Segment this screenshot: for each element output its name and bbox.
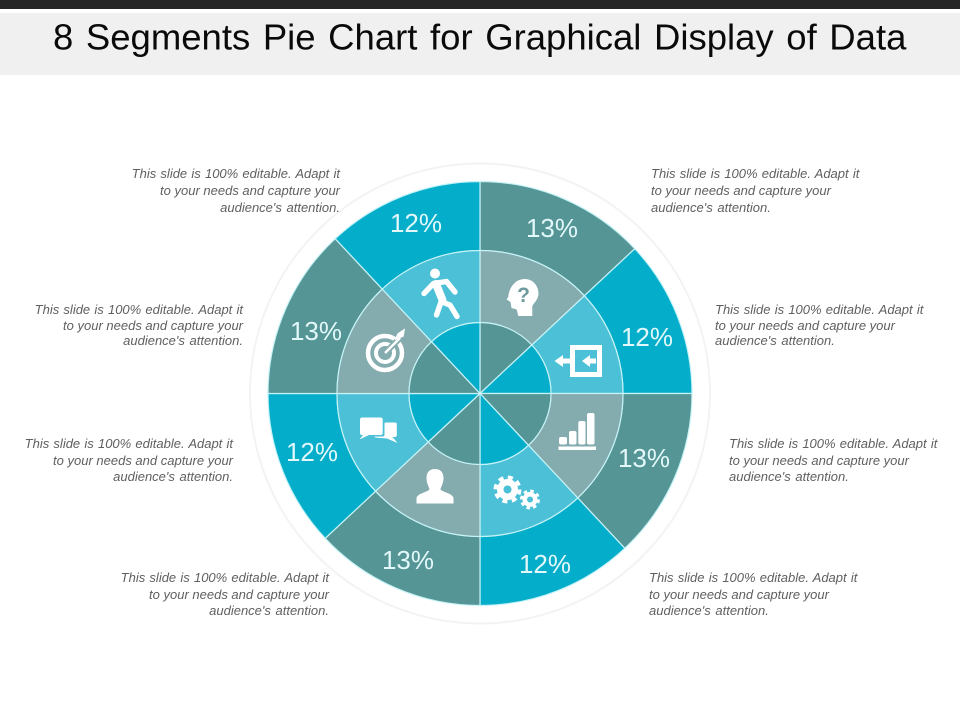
text block: right lower: to your needs and capture your (729, 453, 910, 468)
text block: bottom right: to your needs and capture your (649, 587, 830, 602)
percent label 13% left upper: 13% (290, 316, 342, 346)
outer faint ring (250, 164, 710, 624)
segment 1 (480, 182, 635, 394)
segment 7 (268, 239, 480, 394)
icon: speech bubbles (360, 418, 398, 443)
text block: bottom left: to your needs and capture your (149, 587, 330, 602)
icon: person bust (416, 469, 454, 504)
text block: left lower (25, 436, 234, 484)
text block: top right: to your needs and capture your (651, 183, 832, 198)
icon: bar chart (558, 413, 596, 450)
text block: bottom right: This slide is 100% editable. Adapt it (649, 570, 859, 585)
icon: target (368, 330, 404, 370)
percent label 12% left lower: 12% (286, 437, 338, 467)
text block: bottom right: audience's attention. (649, 603, 769, 618)
icon: walking person (424, 268, 457, 316)
icon: gears (496, 478, 538, 508)
text block: right upper: audience's attention. (715, 333, 835, 348)
text block: right lower: audience's attention. (729, 469, 849, 484)
segment 5 (325, 394, 480, 606)
text block: left upper: audience's attention. (123, 333, 243, 348)
segment 4 (480, 394, 625, 606)
text block: top right (651, 166, 861, 215)
text block: right lower (729, 436, 939, 484)
title banner (0, 13, 960, 75)
text block: right upper: to your needs and capture your (715, 318, 896, 333)
percent label 13% top right: 13% (526, 213, 578, 243)
segment 8 (335, 182, 480, 394)
text block: bottom left (121, 570, 330, 618)
text block: bottom left: This slide is 100% editable. Adapt it (121, 570, 330, 585)
segment 6 (268, 394, 480, 538)
text block: top left: audience's attention. (220, 200, 340, 215)
text block: left lower: audience's attention. (113, 469, 233, 484)
percent label 12% bottom right: 12% (519, 549, 571, 579)
text block: right upper: This slide is 100% editable. Adapt it (715, 302, 925, 317)
text block: top right: This slide is 100% editable. Adapt it (651, 166, 861, 181)
text block: top left: This slide is 100% editable. Adapt it (132, 166, 341, 181)
text block: bottom right (649, 570, 859, 618)
percent label 12% right upper: 12% (621, 322, 673, 352)
text block: top left (132, 166, 341, 215)
text block: right upper (715, 302, 925, 348)
percent label 13% bottom left: 13% (382, 545, 434, 575)
title: 8 Segments Pie Chart for Graphical Display of Data (53, 16, 907, 58)
pie chart (268, 182, 692, 606)
icon: head with question mark (507, 279, 538, 316)
percent label 12% top left: 12% (390, 208, 442, 238)
icon: box with arrows (554, 348, 600, 374)
text block: left upper (35, 302, 244, 348)
text block: top right: audience's attention. (651, 200, 771, 215)
segment 3 (480, 394, 692, 548)
text block: right lower: This slide is 100% editable. Adapt it (729, 436, 939, 451)
text block: bottom left: audience's attention. (209, 603, 329, 618)
segment 2 (480, 249, 692, 394)
icon: head with question mark: ? (517, 284, 530, 307)
text block: left upper: to your needs and capture your (63, 318, 244, 333)
text block: left lower: to your needs and capture your (53, 453, 234, 468)
text block: left upper: This slide is 100% editable. Adapt it (35, 302, 244, 317)
percent label 13% right lower: 13% (618, 443, 670, 473)
text block: top left: to your needs and capture your (160, 183, 341, 198)
text block: left lower: This slide is 100% editable. Adapt it (25, 436, 234, 451)
